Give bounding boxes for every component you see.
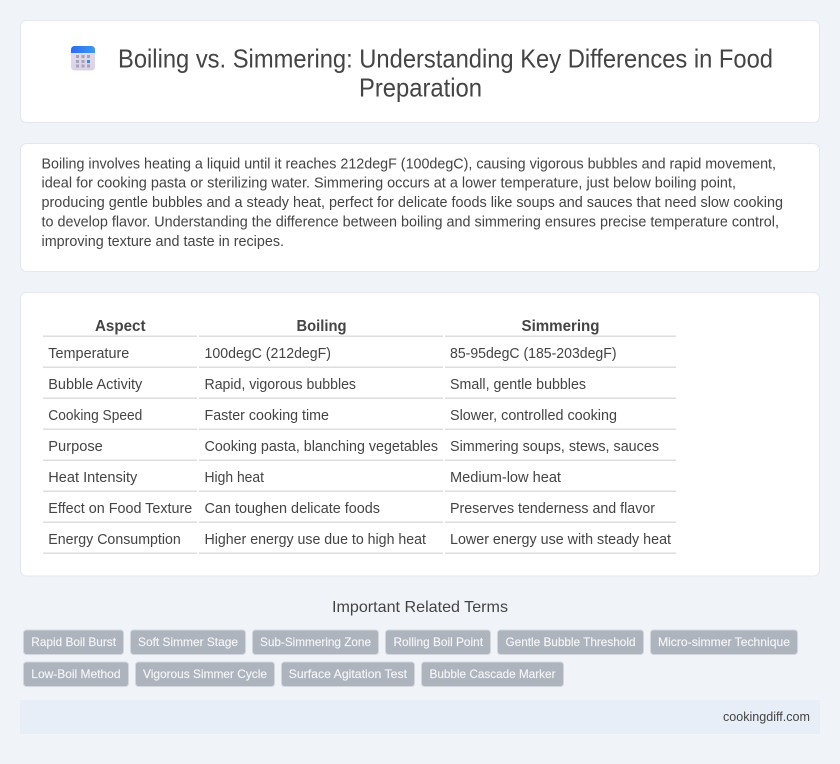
- title: Boiling vs. Simmering: Understanding Key Differences in Food: [118, 46, 773, 74]
- row: cooking speed: Cooking Speed: [48, 408, 142, 424]
- title: [118, 46, 773, 102]
- row: heat intensity: High heat: [204, 470, 264, 486]
- tag: [650, 630, 798, 654]
- tag: [282, 662, 414, 686]
- row: purpose: Simmering soups, stews, sauces: [450, 439, 659, 455]
- tag: Rolling Boil Point: [394, 635, 484, 649]
- row: effect on food texture: Effect on Food Texture: [48, 501, 192, 517]
- row: purpose: Purpose: [48, 439, 103, 455]
- tag: Rapid Boil Burst: [31, 635, 117, 649]
- tag: [422, 662, 564, 686]
- table header row: Aspect: [95, 318, 146, 335]
- tag: [498, 630, 644, 654]
- row: temperature: Temperature: [48, 346, 129, 362]
- tag: [130, 630, 246, 654]
- footer bar: [20, 700, 820, 734]
- panel: comparison table: [20, 292, 820, 576]
- row: effect on food texture: Can toughen delicate foods: [204, 501, 380, 517]
- row: heat intensity: [48, 470, 561, 486]
- tag: [24, 630, 124, 654]
- tag: [386, 630, 490, 654]
- footer bar: cookingdiff.com: [723, 709, 810, 724]
- table header row: Boiling: [296, 318, 346, 335]
- row: bubble activity: [48, 377, 586, 393]
- tag: Surface Agitation Test: [289, 667, 408, 681]
- related term tags: [24, 630, 798, 686]
- tag: Low-Boil Method: [31, 667, 120, 681]
- tag: Vigorous Simmer Cycle: [143, 667, 267, 681]
- row: energy consumption: [48, 532, 671, 548]
- row: cooking speed: [48, 408, 617, 424]
- row: energy consumption: Higher energy use due to high heat: [204, 532, 426, 548]
- row: bubble activity: Bubble Activity: [48, 377, 143, 393]
- row: temperature: 100degC (212degF): [204, 346, 331, 362]
- row: cooking speed: Slower, controlled cooking: [450, 408, 617, 424]
- table header row: Simmering: [522, 318, 600, 335]
- row: temperature: [48, 346, 617, 362]
- panel: intro paragraph: [20, 144, 820, 272]
- tag: [252, 630, 378, 654]
- title: Preparation: [359, 74, 482, 102]
- tag: [136, 662, 274, 686]
- tag: Soft Simmer Stage: [138, 635, 238, 649]
- tag: Bubble Cascade Marker: [430, 667, 556, 681]
- intro text: to develop flavor. Understanding the difference between boiling and simmering ensures precise temperature control,: [42, 214, 779, 230]
- row: energy consumption: Energy Consumption: [48, 532, 181, 548]
- tag: [24, 662, 128, 686]
- row: bubble activity: Small, gentle bubbles: [450, 377, 586, 393]
- row: bubble activity: Rapid, vigorous bubbles: [204, 377, 356, 393]
- tag: Micro-simmer Technique: [658, 635, 790, 649]
- intro text: ideal for cooking pasta or sterilizing water. Simmering occurs at a lower temperature, just below boiling point,: [42, 176, 736, 192]
- intro text: producing gentle bubbles and a steady heat, perfect for delicate foods like soups and sauces that need slow cooking: [42, 195, 783, 211]
- row: heat intensity: Heat Intensity: [48, 470, 138, 486]
- row: temperature: 85-95degC (185-203degF): [450, 346, 616, 362]
- intro text: Boiling involves heating a liquid until it reaches 212degF (100degC), causing vigorous bubbles and rapid movement,: [42, 156, 776, 172]
- intro text: [42, 156, 783, 250]
- row: effect on food texture: [48, 501, 655, 517]
- row: purpose: [48, 439, 659, 455]
- row: heat intensity: Medium-low heat: [450, 470, 561, 486]
- row: effect on food texture: Preserves tenderness and flavor: [450, 501, 655, 517]
- tag: Sub-Simmering Zone: [260, 635, 371, 649]
- table header row: [95, 318, 600, 335]
- intro text: improving texture and taste in recipes.: [42, 234, 284, 250]
- heading: important related terms: Important Related Terms: [332, 599, 508, 616]
- header panel: [20, 20, 820, 122]
- tag: Gentle Bubble Threshold: [506, 635, 636, 649]
- row: cooking speed: Faster cooking time: [204, 408, 329, 424]
- icon: calendar: [71, 46, 95, 70]
- row: energy consumption: Lower energy use with steady heat: [450, 532, 671, 548]
- row: purpose: Cooking pasta, blanching vegetables: [204, 439, 438, 455]
